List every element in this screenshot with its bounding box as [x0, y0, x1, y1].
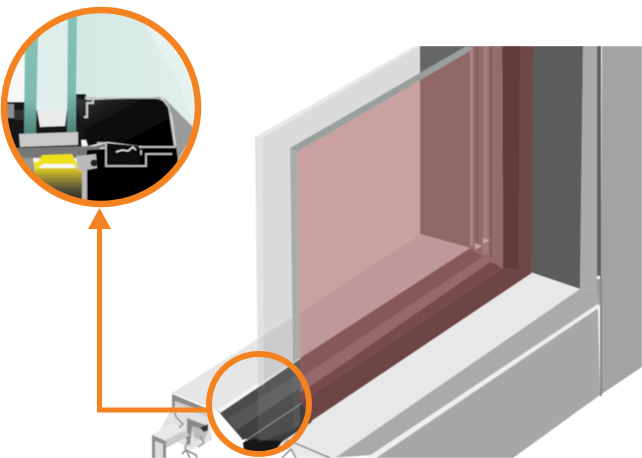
- sash profile, dark section: [218, 358, 300, 440]
- mauve inner side: [420, 50, 470, 248]
- mint gap between panes: [36, 20, 68, 110]
- glazing clip: [84, 98, 93, 117]
- centre grey web: [76, 153, 98, 200]
- sash lower dark part: [244, 400, 312, 442]
- detail inset circle: [0, 6, 202, 208]
- profile body: [76, 97, 176, 150]
- right wall face: [600, 46, 642, 395]
- pink glass pane: [297, 80, 420, 314]
- sill top surface left: [172, 314, 300, 411]
- inset orange ring: [4, 10, 198, 204]
- black lower backing: [86, 146, 178, 201]
- arrow from sill highlight to detail inset: [88, 208, 207, 410]
- highlight circle on window sill: [209, 354, 309, 454]
- yellow thermal insert: [34, 167, 83, 199]
- double glazing panes: [24, 34, 38, 134]
- sash profile, tinted: [300, 248, 503, 402]
- thermal break: [103, 143, 140, 167]
- dark inner reveal: [530, 46, 583, 289]
- side wall grey: [163, 97, 196, 160]
- white sill: [278, 273, 580, 458]
- window frame assembly: [152, 44, 642, 458]
- profile top highlight: [218, 356, 300, 413]
- black gasket: [242, 439, 282, 451]
- black glazing section: [7, 101, 26, 149]
- spacer: [37, 110, 67, 127]
- lower frame faces: [372, 307, 600, 458]
- inset background and glass: [8, 78, 178, 169]
- end profile cross-sections: [160, 404, 212, 450]
- glass pane frame: [255, 46, 420, 386]
- maroon glazing bead: [502, 46, 533, 273]
- setting block: [19, 132, 78, 147]
- grey base strip: [14, 143, 107, 158]
- frame jamb: [580, 46, 597, 290]
